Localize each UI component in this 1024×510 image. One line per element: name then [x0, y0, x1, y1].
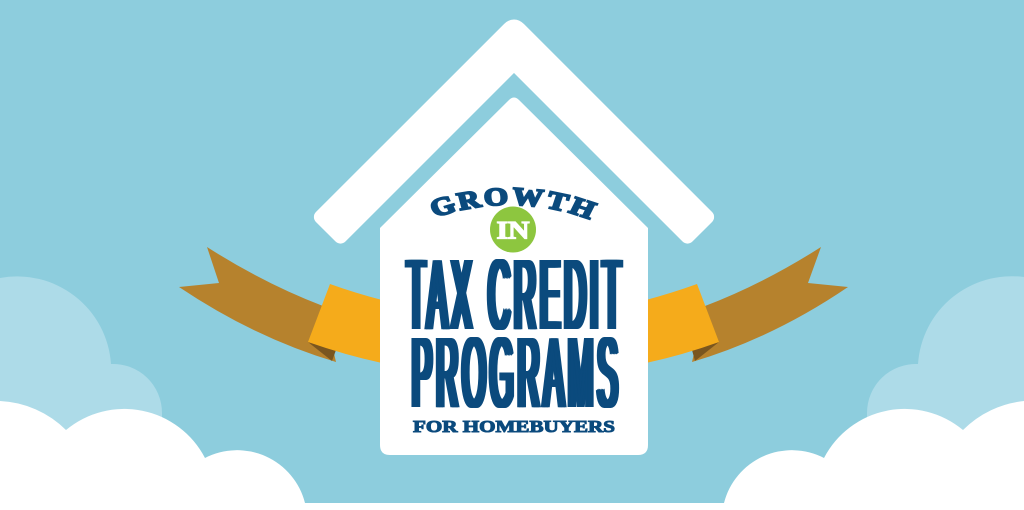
title line: tax credit: TAX CREDIT: [407, 239, 625, 351]
title line: programs: PROGRAMS: [412, 317, 622, 429]
left background cloud: [0, 276, 162, 470]
roof chevron: [321, 26, 707, 237]
badge: in: [490, 206, 536, 252]
right ribbon: [646, 247, 848, 363]
heading: growth: GROWTH: [430, 186, 599, 220]
left foreground cloud: [0, 401, 305, 503]
right background cloud: [867, 276, 1024, 470]
house body: [380, 98, 648, 455]
left ribbon: [179, 247, 382, 363]
badge: in: IN: [496, 218, 530, 244]
subheading: for homebuyers: FOR HOMEBUYERS: [413, 417, 615, 436]
right foreground cloud: [724, 401, 1024, 503]
